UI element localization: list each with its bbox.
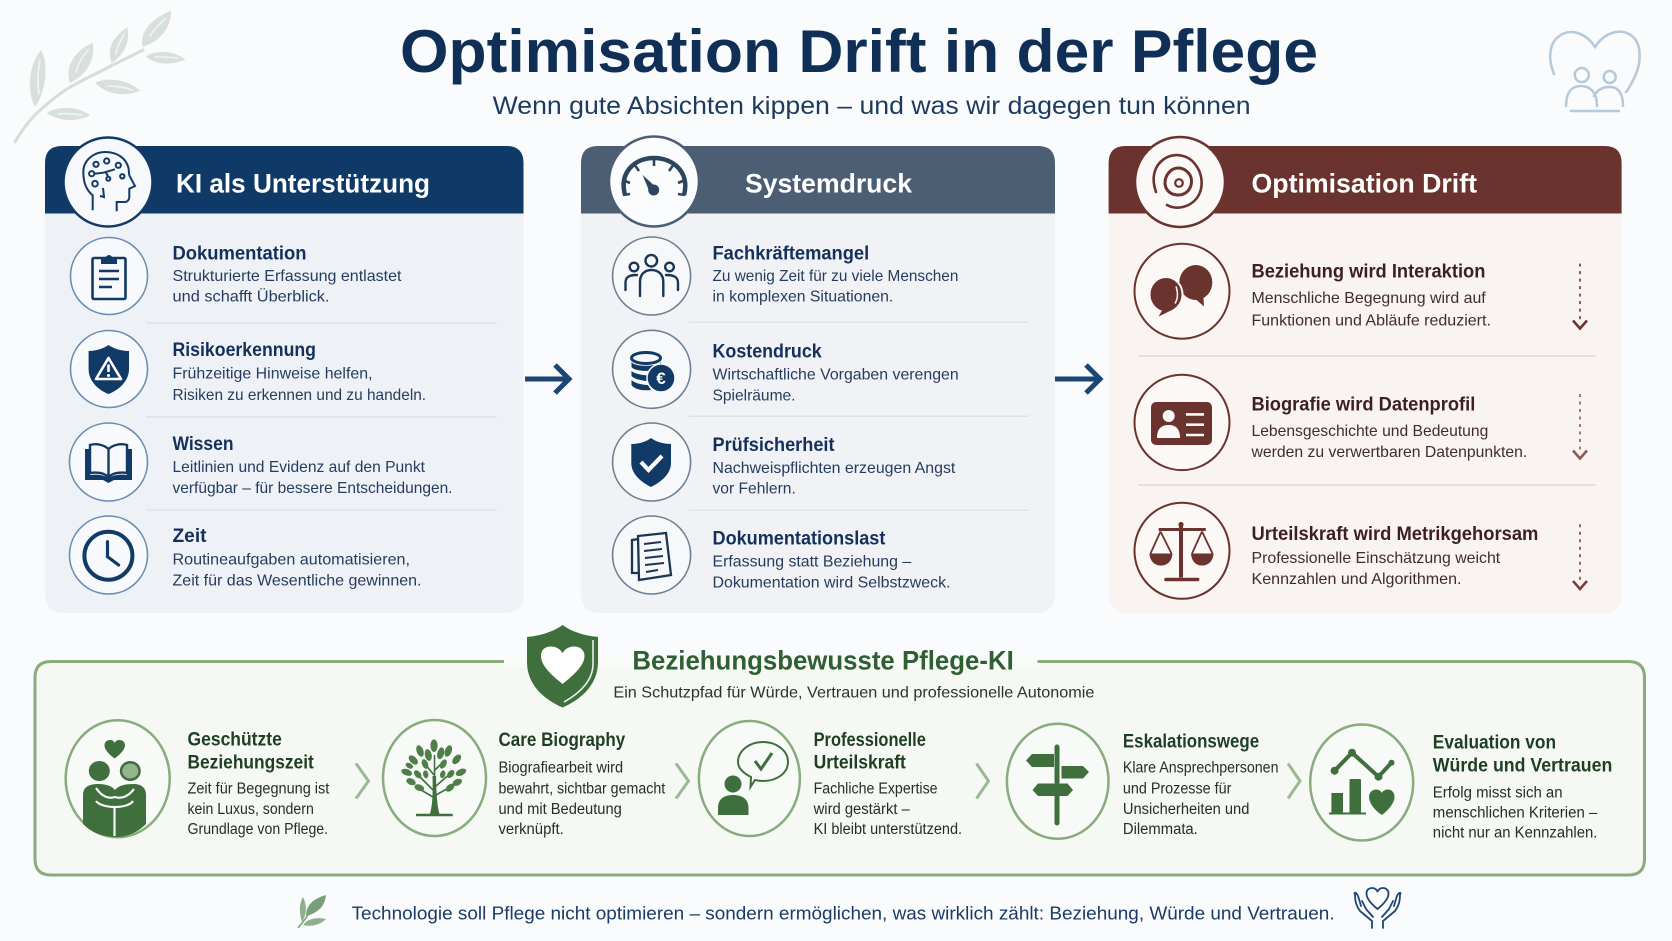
arrow: dotted down — [1573, 394, 1587, 458]
step: Eskalationswege: Dilemmata. — [1123, 821, 1198, 838]
item: Kostendruck: Spielräume. — [712, 387, 796, 404]
item: Biografie wird Datenprofil: Biografie wird Datenprofil — [1252, 395, 1475, 416]
panel header — [45, 146, 524, 214]
subheading: Ein Schutzpfad für Würde, Vertrauen und professionelle Autonomie — [613, 684, 1095, 701]
step: Evaluation von Würde und Vertrauen: nicht nur an Kennzahlen. — [1433, 824, 1597, 841]
step: Geschützte Beziehungszeit — [66, 720, 330, 838]
step: Eskalationswege — [1007, 724, 1278, 839]
icon: embracing couple — [66, 720, 170, 837]
item: Prüfsicherheit: Prüfsicherheit — [712, 435, 835, 456]
step: Geschützte Beziehungszeit: Zeit für Begegnung ist — [188, 780, 330, 797]
step: Care Biography: bewahrt, sichtbar gemacht — [498, 780, 666, 797]
step: Evaluation von Würde und Vertrauen: menschlichen Kriterien – — [1433, 804, 1598, 821]
heading: KI als Unterstützung — [176, 169, 430, 199]
step: Eskalationswege: und Prozesse für — [1123, 780, 1231, 797]
item: Dokumentationslast: Erfassung statt Beziehung – — [712, 554, 911, 571]
chevron — [676, 764, 688, 798]
icon: gauge — [609, 136, 699, 226]
step: Care Biography: verknüpft. — [498, 821, 564, 838]
item: Dokumentationslast: Dokumentationslast — [712, 528, 886, 549]
item: Fachkräftemangel — [613, 237, 958, 315]
item: Biografie wird Datenprofil: Lebensgeschichte und Bedeutung — [1252, 423, 1488, 440]
item: Zeit — [70, 516, 422, 594]
icon: clock — [70, 516, 148, 594]
panel body — [45, 146, 524, 613]
step: Professionelle Urteilskraft: Professionelle — [814, 729, 926, 751]
item: Kostendruck — [613, 330, 959, 408]
icon: small leaf — [298, 895, 326, 928]
panel: Beziehungsbewusste Pflege-KI — [35, 625, 1644, 875]
item: Dokumentation: Strukturierte Erfassung entlastet — [172, 268, 402, 285]
item: Wissen: Leitlinien und Evidenz auf den Punkt — [172, 459, 426, 476]
step: Geschützte Beziehungszeit: kein Luxus, sondern — [188, 801, 314, 818]
arrow: Systemdruck to Optimisation Drift — [1055, 365, 1100, 393]
heading: Optimisation Drift — [1252, 169, 1477, 199]
item: Dokumentationslast: Dokumentation wird Selbstzweck. — [712, 574, 950, 591]
icon: clipboard — [70, 238, 148, 314]
step: Eskalationswege: Unsicherheiten und — [1123, 801, 1249, 818]
step: Professionelle Urteilskraft: Fachliche Expertise — [814, 780, 938, 797]
title: Optimisation Drift in der Pflege — [400, 18, 1318, 85]
icon: shield with check — [613, 423, 691, 501]
item: Urteilskraft wird Metrikgehorsam: Urteilskraft wird Metrikgehorsam — [1252, 524, 1538, 545]
step: Professionelle Urteilskraft: wird gestärkt – — [813, 801, 910, 818]
step: Geschützte Beziehungszeit: Geschützte — [188, 728, 282, 750]
step: Evaluation von Würde und Vertrauen — [1310, 724, 1612, 841]
footer — [298, 888, 1400, 928]
item: Prüfsicherheit: vor Fehlern. — [712, 481, 796, 498]
closing statement: Technologie soll Pflege nicht optimieren – sondern ermöglichen, was wirklich zählt: Beziehung, Würde und Vertrauen. — [352, 902, 1335, 923]
item: Urteilskraft wird Metrikgehorsam — [1134, 503, 1587, 599]
heading: Systemdruck — [745, 169, 913, 199]
icon: heart with people — [1550, 32, 1640, 111]
panel frame — [35, 655, 1644, 875]
item: Kostendruck: Kostendruck — [712, 342, 822, 363]
step: Evaluation von Würde und Vertrauen: Würde und Vertrauen — [1433, 755, 1612, 777]
item: Prüfsicherheit — [613, 423, 956, 501]
panel: Optimisation Drift — [1109, 137, 1622, 613]
item: Wissen: Wissen — [172, 434, 234, 455]
item: Risikoerkennung: Risiken zu erkennen und zu handeln. — [172, 387, 426, 404]
item: Fachkräftemangel: Zu wenig Zeit für zu viele Menschen — [712, 268, 958, 285]
item: Dokumentation — [70, 238, 402, 314]
step: Eskalationswege: Klare Ansprechpersonen — [1123, 759, 1278, 776]
item: Zeit: Zeit — [172, 526, 207, 547]
icon: signpost — [1007, 724, 1108, 839]
chevron — [1288, 764, 1300, 798]
icon: scales — [1134, 503, 1230, 599]
icon: head with network — [64, 138, 152, 226]
panel header — [581, 146, 1055, 214]
panel header — [1109, 146, 1622, 214]
item: Urteilskraft wird Metrikgehorsam: Kennzahlen und Algorithmen. — [1252, 571, 1462, 588]
panel body — [581, 146, 1055, 613]
step: Eskalationswege: Eskalationswege — [1123, 731, 1259, 753]
icon: tree — [383, 720, 486, 836]
heading: Beziehungsbewusste Pflege-KI — [632, 645, 1014, 675]
step: Geschützte Beziehungszeit: Grundlage von Pflege. — [188, 821, 328, 838]
decorative leaf branch — [15, 11, 185, 142]
panel body — [1109, 146, 1622, 613]
item: Wissen — [70, 423, 452, 501]
item: Zeit: Zeit für das Wesentliche gewinnen. — [172, 573, 422, 590]
icon: speech bubbles — [1134, 244, 1230, 339]
item: Wissen: verfügbar – für bessere Entscheidungen. — [172, 480, 452, 497]
icon: coins with euro: € — [656, 369, 666, 388]
item: Zeit: Routineaufgaben automatisieren, — [172, 552, 410, 568]
step: Professionelle Urteilskraft: KI bleibt unterstützend. — [814, 821, 962, 838]
item: Biografie wird Datenprofil — [1134, 375, 1587, 470]
step: Professionelle Urteilskraft — [699, 721, 962, 838]
panel: KI als Unterstützung — [45, 138, 524, 613]
item: Kostendruck: Wirtschaftliche Vorgaben verengen — [712, 366, 959, 383]
icon: open book — [70, 423, 148, 501]
step: Professionelle Urteilskraft: Urteilskraft — [814, 751, 906, 773]
item: Beziehung wird Interaktion — [1134, 244, 1587, 339]
item: Dokumentation: Dokumentation — [172, 243, 306, 264]
item: Urteilskraft wird Metrikgehorsam: Professionelle Einschätzung weicht — [1252, 550, 1501, 567]
arrow: dotted down — [1573, 524, 1587, 589]
icon: documents — [613, 516, 691, 594]
item: Risikoerkennung: Risikoerkennung — [172, 340, 316, 361]
chevron — [356, 764, 368, 798]
step: Care Biography — [383, 720, 666, 838]
item: Dokumentation: und schafft Überblick. — [172, 288, 330, 306]
subtitle: Wenn gute Absichten kippen – und was wir dagegen tun können — [493, 92, 1251, 120]
step: Care Biography: Biografiearbeit wird — [498, 759, 623, 776]
icon: hands holding heart — [1354, 888, 1400, 928]
arrow: dotted down — [1573, 264, 1587, 328]
chevron — [976, 764, 988, 798]
item: Prüfsicherheit: Nachweispflichten erzeugen Angst — [712, 460, 956, 477]
step: Evaluation von Würde und Vertrauen: Evaluation von — [1433, 731, 1556, 753]
icon: chart with heart — [1310, 724, 1413, 840]
step: Care Biography: und mit Bedeutung — [498, 801, 622, 818]
icon: shield with heart — [527, 625, 598, 708]
icon: id card — [1134, 375, 1230, 470]
panel: Systemdruck — [581, 136, 1055, 613]
item: Biografie wird Datenprofil: werden zu verwertbaren Datenpunkten. — [1251, 444, 1527, 461]
icon: group of people — [613, 237, 691, 315]
icon: spiral — [1135, 137, 1225, 227]
icon: shield with warning — [70, 330, 148, 408]
item: Fachkräftemangel: Fachkräftemangel — [712, 243, 869, 264]
step: Geschützte Beziehungszeit: Beziehungszeit — [188, 751, 314, 773]
icon: person with speech bubble — [699, 721, 800, 836]
item: Risikoerkennung — [70, 330, 426, 408]
item: Beziehung wird Interaktion: Funktionen und Abläufe reduziert. — [1252, 312, 1491, 329]
item: Fachkräftemangel: in komplexen Situationen. — [712, 289, 893, 306]
item: Risikoerkennung: Frühzeitige Hinweise helfen, — [172, 366, 372, 382]
icon: coins with euro — [613, 330, 691, 408]
item: Beziehung wird Interaktion: Beziehung wird Interaktion — [1252, 262, 1485, 283]
arrow: KI to Systemdruck — [525, 365, 569, 393]
step: Evaluation von Würde und Vertrauen: Erfolg misst sich an — [1433, 784, 1563, 801]
step: Care Biography: Care Biography — [498, 729, 625, 751]
item: Beziehung wird Interaktion: Menschliche Begegnung wird auf — [1252, 290, 1486, 307]
item: Dokumentationslast — [613, 516, 950, 594]
